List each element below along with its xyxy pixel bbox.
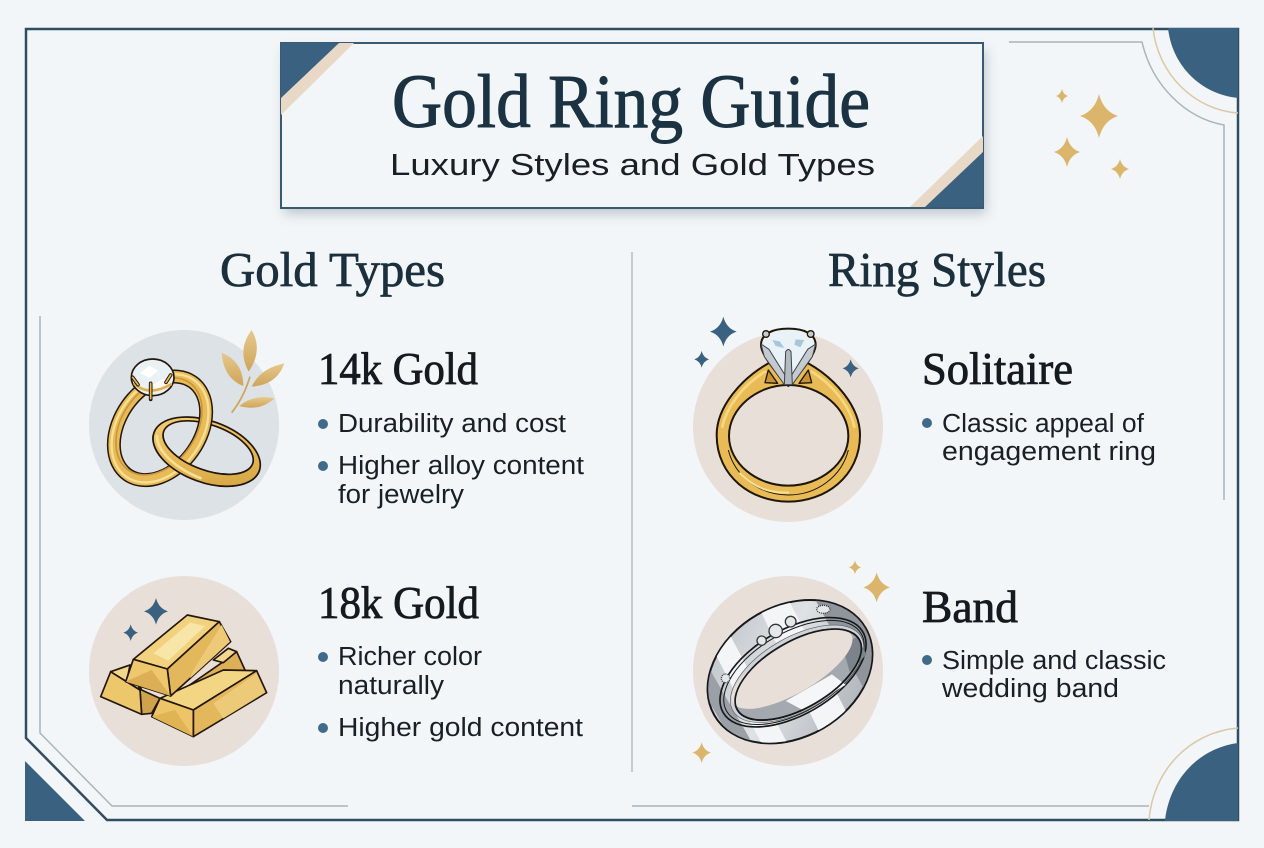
bullet list: Classic appeal of (942, 410, 1145, 438)
panel: 18k Gold (89, 576, 583, 766)
bullet list: Richer color (338, 643, 483, 671)
heading: Gold Types: Gold Types (220, 242, 445, 297)
bullet list: Higher gold content (338, 714, 583, 742)
center divider (631, 252, 633, 772)
title banner (281, 43, 986, 214)
circle background (693, 576, 883, 766)
bullet list (318, 643, 583, 742)
bullet list (922, 410, 1156, 466)
circle background (693, 332, 883, 522)
panel: 14k Gold (89, 330, 584, 520)
bullet list: for jewelry (338, 481, 464, 509)
subtitle: Luxury Styles and Gold Types (390, 147, 875, 182)
bullet list: Durability and cost (338, 410, 566, 438)
title: Gold Ring Guide (392, 60, 870, 144)
heading: Solitaire (922, 344, 1073, 394)
icon: gold bars (101, 598, 267, 737)
bullet list: wedding band (941, 675, 1119, 703)
bullet list: Higher alloy content (338, 452, 584, 480)
icon: silver wedding band (692, 560, 890, 763)
circle background (89, 576, 279, 766)
panel: Solitaire (693, 317, 1156, 522)
icon: interlocked gold rings (91, 330, 284, 501)
corner: bottom left (25, 761, 85, 821)
heading: 18k Gold (318, 578, 479, 628)
bullet list: engagement ring (942, 438, 1156, 466)
icon: solitaire ring (694, 317, 860, 502)
panel: Band (679, 561, 1166, 776)
heading: Band (922, 582, 1018, 632)
bullet list: Simple and classic (942, 647, 1166, 675)
corner: top right (1153, 28, 1238, 113)
heading: 14k Gold (318, 344, 478, 394)
heading: Ring Styles: Ring Styles (828, 242, 1046, 297)
circle background (89, 330, 279, 520)
bullet list (922, 647, 1166, 703)
bullet list (318, 410, 584, 509)
bullet list: naturally (338, 672, 444, 700)
corner: bottom right (1149, 728, 1238, 821)
gold sparkles top right (1054, 89, 1129, 179)
